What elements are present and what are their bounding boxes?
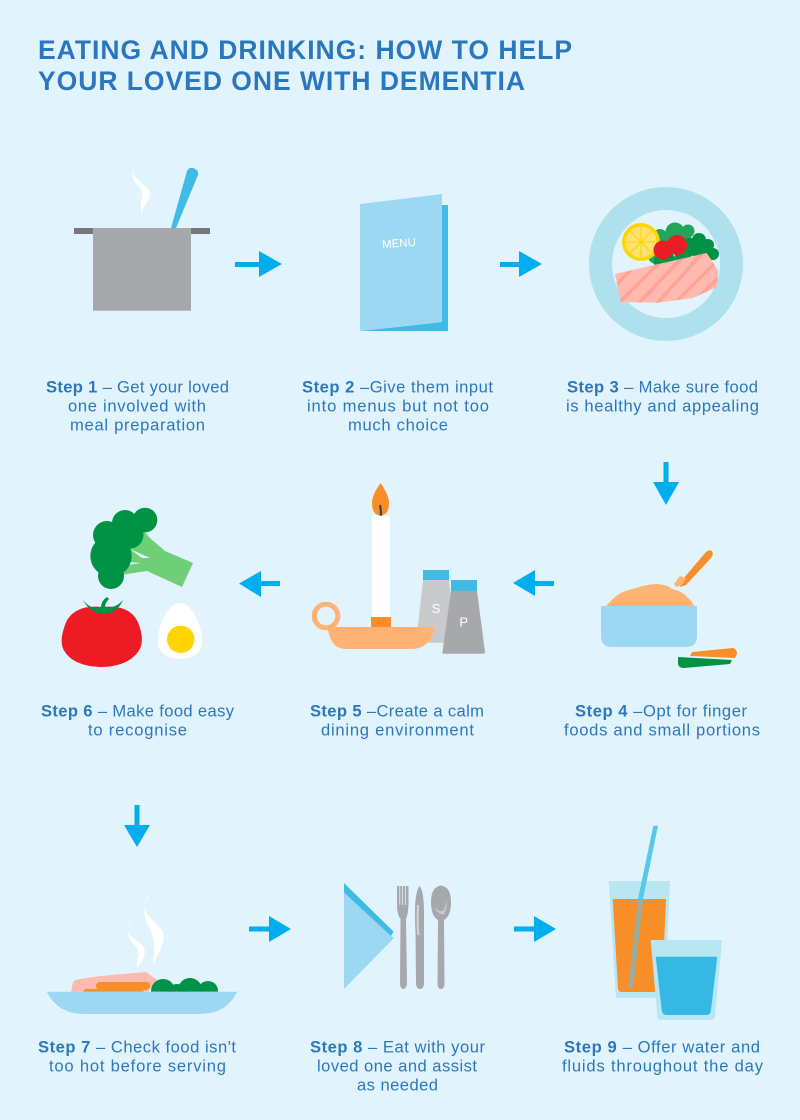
step 5 text: Step 5 –Create a calm (310, 702, 484, 721)
step 6 text: Step 6 – Make food easy (41, 702, 235, 721)
arrow: step 7 to 8 (249, 916, 291, 942)
step 9 text: fluids throughout the day (562, 1057, 764, 1076)
icon: cutlery (397, 886, 451, 989)
step 2 text: much choice (348, 416, 448, 435)
step 1 text: Step 1 – Get your loved (46, 378, 229, 397)
step 6 text (41, 702, 235, 740)
title: YOUR LOVED ONE WITH DEMENTIA (38, 66, 525, 96)
icon: plate of salmon (600, 198, 732, 330)
panel: step 9 (562, 826, 764, 1076)
title: EATING AND DRINKING: HOW TO HELP (38, 35, 572, 65)
step 3 text: Step 3 – Make sure food (567, 378, 758, 397)
icon: hot meal (47, 890, 237, 1014)
icon: menu (360, 194, 448, 331)
step 7 text (38, 1038, 236, 1076)
arrow: step 5 to 6 (239, 571, 280, 597)
step 8 text: as needed (357, 1076, 438, 1095)
step 8 text: loved one and assist (317, 1057, 477, 1076)
panel: step 7 (38, 890, 237, 1076)
icon: boiled egg (158, 603, 202, 659)
step 4 text: Step 4 –Opt for finger (575, 702, 747, 721)
step 9 text: Step 9 – Offer water and (564, 1038, 760, 1057)
step 2 text: Step 2 –Give them input (302, 378, 493, 397)
arrow: step 6 to 7 (124, 805, 150, 847)
icon: broccoli (90, 508, 193, 589)
title (38, 35, 572, 96)
icon: juice glass with straw (609, 826, 670, 998)
arrow: step 8 to 9 (514, 916, 556, 942)
step 4 text: foods and small portions (564, 721, 760, 740)
icon: candle and shakers (314, 483, 485, 654)
step 3 text (566, 378, 759, 416)
step 1 text: meal preparation (70, 416, 205, 435)
icon: napkin (344, 883, 394, 989)
icon: water glass (651, 940, 722, 1020)
panel: step 8 (310, 883, 485, 1095)
panel: step 3 (566, 198, 759, 416)
panel: step 6 (41, 508, 235, 740)
panel: step 4 (564, 550, 760, 740)
step 9 text (562, 1038, 764, 1076)
step 8 text: Step 8 – Eat with your (310, 1038, 485, 1057)
step 4 text (564, 702, 760, 740)
step 5 text: dining environment (321, 721, 474, 740)
icon: cooking pot (74, 161, 210, 311)
icon: menu: MENU (382, 237, 416, 251)
arrow: step 2 to 3 (500, 251, 542, 277)
arrow: step 3 to 4 (653, 462, 679, 505)
step 3 text: is healthy and appealing (566, 397, 759, 416)
icon: candle and shakers: P (459, 614, 468, 630)
panel: step 5 (310, 483, 485, 740)
icon: candle and shakers: S (432, 601, 441, 616)
arrow: step 4 to 5 (513, 570, 554, 596)
step 2 text: into menus but not too (307, 397, 489, 416)
step 1 text (46, 378, 229, 435)
step 5 text (310, 702, 484, 740)
step 2 text (302, 378, 493, 435)
step 6 text: to recognise (88, 721, 187, 740)
step 7 text: too hot before serving (49, 1057, 226, 1076)
step 1 text: one involved with (68, 397, 206, 416)
panel: step 2 (302, 194, 493, 435)
step 7 text: Step 7 – Check food isn't (38, 1038, 236, 1057)
panel: step 1 (46, 161, 229, 435)
icon: tomato (62, 597, 142, 667)
step 8 text (310, 1038, 485, 1095)
icon: bowl with finger foods (601, 550, 737, 668)
arrow: step 1 to 2 (235, 251, 282, 277)
